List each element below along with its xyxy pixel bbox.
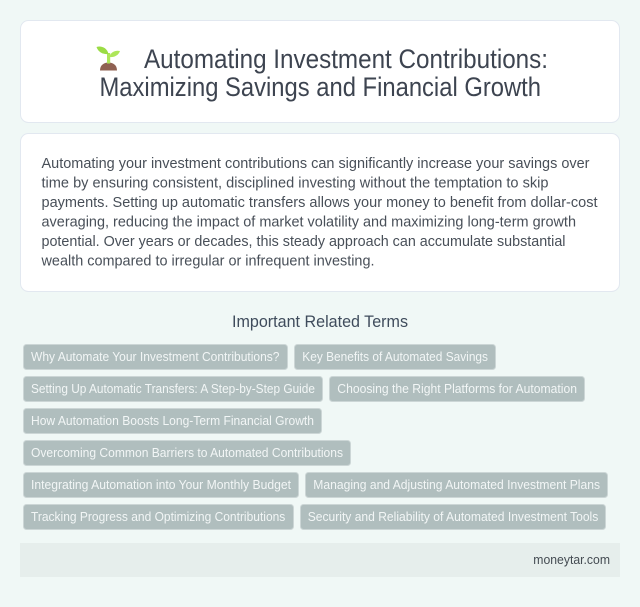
chip: long-term growth xyxy=(24,408,322,434)
paragraph text: averaging, reducing the impact of market volatility and maximizing long-term growth xyxy=(42,214,576,230)
chip: choosing platforms xyxy=(330,376,584,402)
icon: sprout xyxy=(96,47,120,70)
chip: key benefits: Key Benefits of Automated Savings xyxy=(302,349,488,364)
chip: key benefits xyxy=(294,344,496,370)
chip: overcoming barriers: Overcoming Common Barriers to Automated Contributions xyxy=(31,445,343,460)
chip: long-term growth: How Automation Boosts Long-Term Financial Growth xyxy=(31,413,314,428)
chip: security and reliability xyxy=(300,504,606,530)
chip: why automate: Why Automate Your Investment Contributions? xyxy=(31,349,280,364)
related terms chips xyxy=(24,344,608,530)
chip: tracking progress xyxy=(24,504,294,530)
chip: tracking progress: Tracking Progress and Optimizing Contributions xyxy=(31,509,285,524)
paragraph text: wealth compared to irregular or infrequent investing. xyxy=(41,254,374,270)
footer site name: moneytar.com xyxy=(533,552,610,567)
paragraph text: time by ensuring consistent, disciplined investing without the temptation to skip xyxy=(42,176,548,192)
heading line 1: Automating Investment Contributions: xyxy=(144,44,548,74)
panel: title card xyxy=(20,20,620,122)
paragraph text: Automating your investment contributions can significantly increase your savings over xyxy=(42,156,590,172)
chip: setting up transfers xyxy=(24,376,322,402)
chip: choosing platforms: Choosing the Right Platforms for Automation xyxy=(337,381,577,396)
paragraph text: potential. Over years or decades, this steady approach can accumulate substantial xyxy=(42,234,566,250)
chip: why automate xyxy=(24,344,288,370)
footer bar xyxy=(20,543,620,577)
chip: security and reliability: Security and Reliability of Automated Investment Tools xyxy=(308,509,598,524)
paragraph text: payments. Setting up automatic transfers allows your money to benefit from dollar-cost xyxy=(42,195,598,211)
chip: monthly budget: Integrating Automation into Your Monthly Budget xyxy=(31,477,291,492)
chip: monthly budget xyxy=(24,472,298,498)
paragraph text xyxy=(41,156,598,270)
chip: managing plans xyxy=(306,472,608,498)
heading line 2: Maximizing Savings and Financial Growth xyxy=(100,72,541,102)
chip: managing plans: Managing and Adjusting Automated Investment Plans xyxy=(313,477,600,492)
section heading: related terms: Important Related Terms xyxy=(232,313,408,331)
chip: overcoming barriers xyxy=(24,440,350,466)
panel: intro paragraph xyxy=(20,134,620,292)
chip: setting up transfers: Setting Up Automatic Transfers: A Step-by-Step Guide xyxy=(31,381,315,396)
